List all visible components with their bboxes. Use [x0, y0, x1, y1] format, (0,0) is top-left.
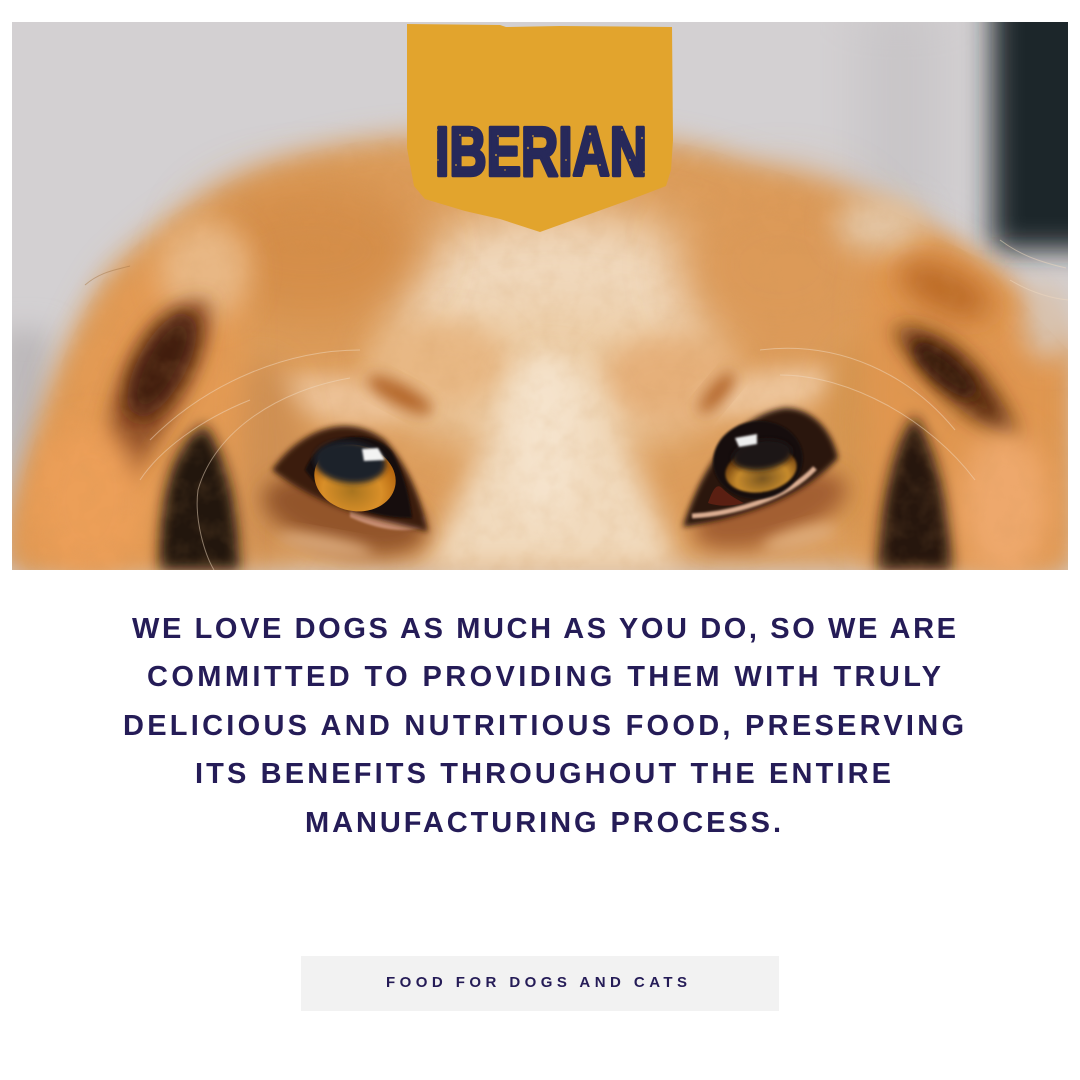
mission statement: ITS BENEFITS THROUGHOUT THE ENTIRE [195, 758, 891, 790]
distressed specks [436, 129, 645, 173]
tagline bar: FOOD FOR DOGS AND CATS [386, 974, 687, 991]
photo background [0, 0, 1080, 570]
left ear [12, 220, 250, 575]
left eye [255, 426, 435, 570]
cheeks [244, 370, 313, 570]
logo badge: Iberian [407, 24, 673, 232]
mission statement: DELICIOUS AND NUTRITIOUS FOOD, PRESERVING [123, 710, 964, 742]
mission statement: MANUFACTURING PROCESS. [305, 807, 781, 839]
mission statement: COMMITTED TO PROVIDING THEM WITH TRULY [147, 661, 941, 693]
dog head fur [12, 131, 1068, 570]
tagline bar [301, 956, 779, 1011]
badge shape [407, 24, 673, 232]
photo: dog face close-up [0, 0, 1080, 580]
surrounding brown fur [255, 460, 435, 570]
fur texture [142, 242, 972, 566]
forehead glow [390, 210, 730, 390]
surrounding brown fur [684, 466, 854, 561]
right eye [683, 408, 856, 565]
brand name: IBERIAN [435, 112, 647, 190]
mission statement: WE LOVE DOGS AS MUCH AS YOU DO, SO WE ARE [132, 613, 956, 645]
right ear [835, 197, 1072, 580]
nose bridge [425, 358, 680, 570]
brow marks [363, 368, 437, 422]
whiskers and stray hairs [85, 240, 1068, 570]
mission statement [123, 613, 964, 839]
